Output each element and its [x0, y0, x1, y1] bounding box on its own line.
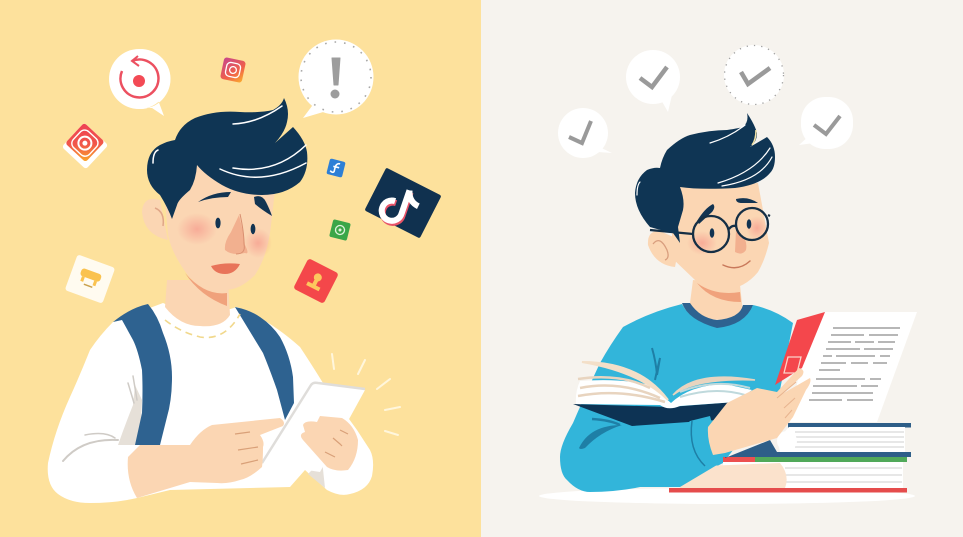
icon: red replay bubble: [109, 49, 171, 116]
icon: dotted check bubble: [724, 45, 784, 105]
figure: distracted student: [48, 98, 400, 503]
ear: [648, 231, 680, 267]
neck: [690, 280, 743, 320]
ear: [142, 199, 168, 240]
hair: [635, 113, 775, 243]
eyebrows: [697, 204, 714, 224]
ground shadow: [539, 488, 915, 504]
open book: [573, 362, 755, 426]
white document: [790, 312, 917, 422]
nose: [735, 230, 746, 254]
sleeve cuff over book: [640, 416, 722, 487]
icon: white chat app: [65, 254, 115, 304]
icon: small blue app: [326, 158, 346, 178]
top book: [725, 423, 911, 458]
hair highlights: [153, 106, 306, 177]
face: [165, 160, 275, 290]
excitement rays: [332, 354, 400, 435]
backpack strap left: [113, 304, 172, 445]
eyebrows: [198, 192, 231, 202]
hand holding booklet: [708, 368, 810, 455]
backpack strap right: [235, 307, 294, 420]
icon: check bubble right: [799, 97, 853, 149]
sweater folds: [652, 348, 660, 380]
face: [672, 183, 769, 290]
icon: red contact app: [293, 258, 339, 304]
neck: [165, 280, 230, 326]
mouth: [211, 263, 240, 274]
icon: small green app: [329, 219, 351, 241]
panel: focused background: [481, 0, 963, 537]
red booklet: [775, 312, 825, 385]
glasses: [650, 208, 770, 252]
icon: large instagram left: [62, 123, 108, 169]
phone: [262, 383, 365, 472]
hair: [147, 98, 307, 219]
lower book and pages: [669, 457, 907, 492]
icon: tiktok tile: [364, 168, 442, 239]
sleeve shadow: [118, 385, 142, 445]
icon: exclamation bubble: [298, 40, 374, 118]
figure: focused student: [539, 113, 917, 504]
icon: check bubble top left: [626, 50, 680, 112]
eyes: [710, 228, 714, 238]
hair highlights: [637, 125, 772, 195]
collar stitching: [165, 314, 240, 338]
nose: [225, 215, 248, 254]
holding hand: [301, 416, 358, 471]
smile: [723, 261, 750, 268]
cheeks: [687, 231, 717, 255]
icon: check bubble far left: [558, 108, 612, 158]
pointing arm and hand: [128, 418, 284, 498]
eyes: [215, 218, 221, 228]
sweater collar: [682, 303, 753, 328]
blue sweater: [560, 304, 793, 492]
icon: small instagram top: [220, 57, 246, 83]
panel: distracted background: [0, 0, 481, 537]
cheeks: [177, 213, 217, 245]
student torso in white sweater: [48, 303, 373, 503]
